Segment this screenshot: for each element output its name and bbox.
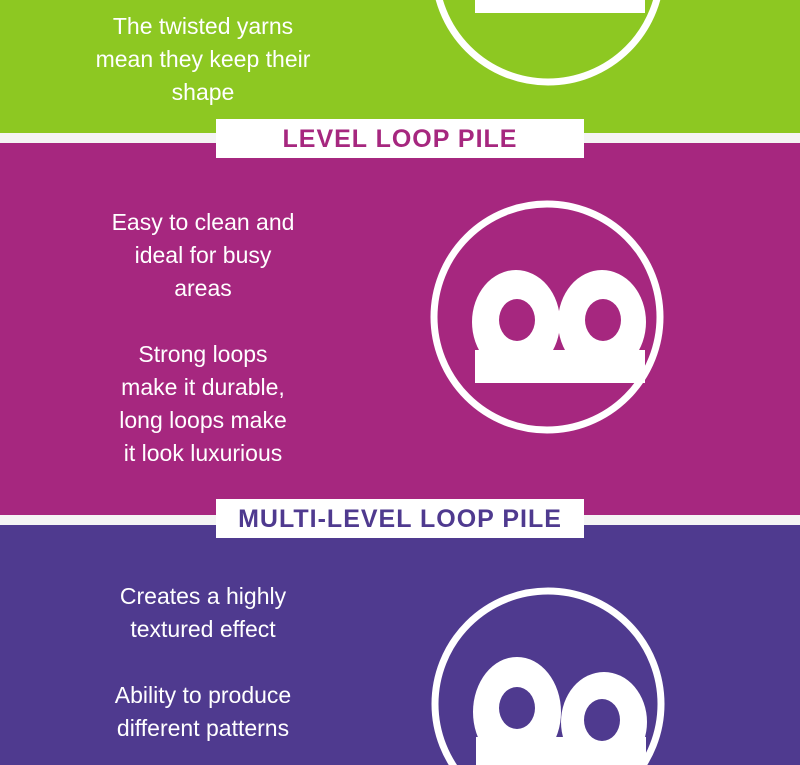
text: green: shape: [172, 79, 234, 105]
text: level loop: long loops make: [119, 407, 287, 433]
icon: level loop: [434, 204, 660, 430]
text: multi-level: textured effect: [130, 616, 276, 642]
text: multi-level: different patterns: [117, 715, 289, 741]
icon: top circle: [435, 0, 661, 82]
text: green: [96, 13, 310, 105]
panel: green top: [0, 0, 800, 133]
text: level loop: Strong loops: [138, 341, 268, 367]
text: green: The twisted yarns: [113, 13, 293, 39]
text: level loop: Easy to clean and: [112, 209, 294, 235]
text: level loop: [112, 209, 294, 466]
text: multi-level: Ability to produce: [115, 682, 291, 708]
icon: multi-level loop: [435, 591, 661, 765]
text: level loop: ideal for busy: [135, 242, 271, 268]
heading: multi-level: MULTI-LEVEL LOOP PILE: [238, 505, 562, 533]
heading: multi-level: [216, 499, 584, 538]
text: level loop: it look luxurious: [124, 440, 282, 466]
panel: level loop pile: [0, 143, 800, 515]
text: level loop: areas: [174, 275, 232, 301]
heading: level loop pile: LEVEL LOOP PILE: [283, 125, 517, 153]
heading: level loop pile: [216, 119, 584, 158]
panel: multi-level loop pile: [0, 525, 800, 765]
text: multi-level: Creates a highly: [120, 583, 286, 609]
text: green: mean they keep their: [96, 46, 310, 72]
text: level loop: make it durable,: [121, 374, 285, 400]
text: multi-level: [114, 583, 291, 741]
